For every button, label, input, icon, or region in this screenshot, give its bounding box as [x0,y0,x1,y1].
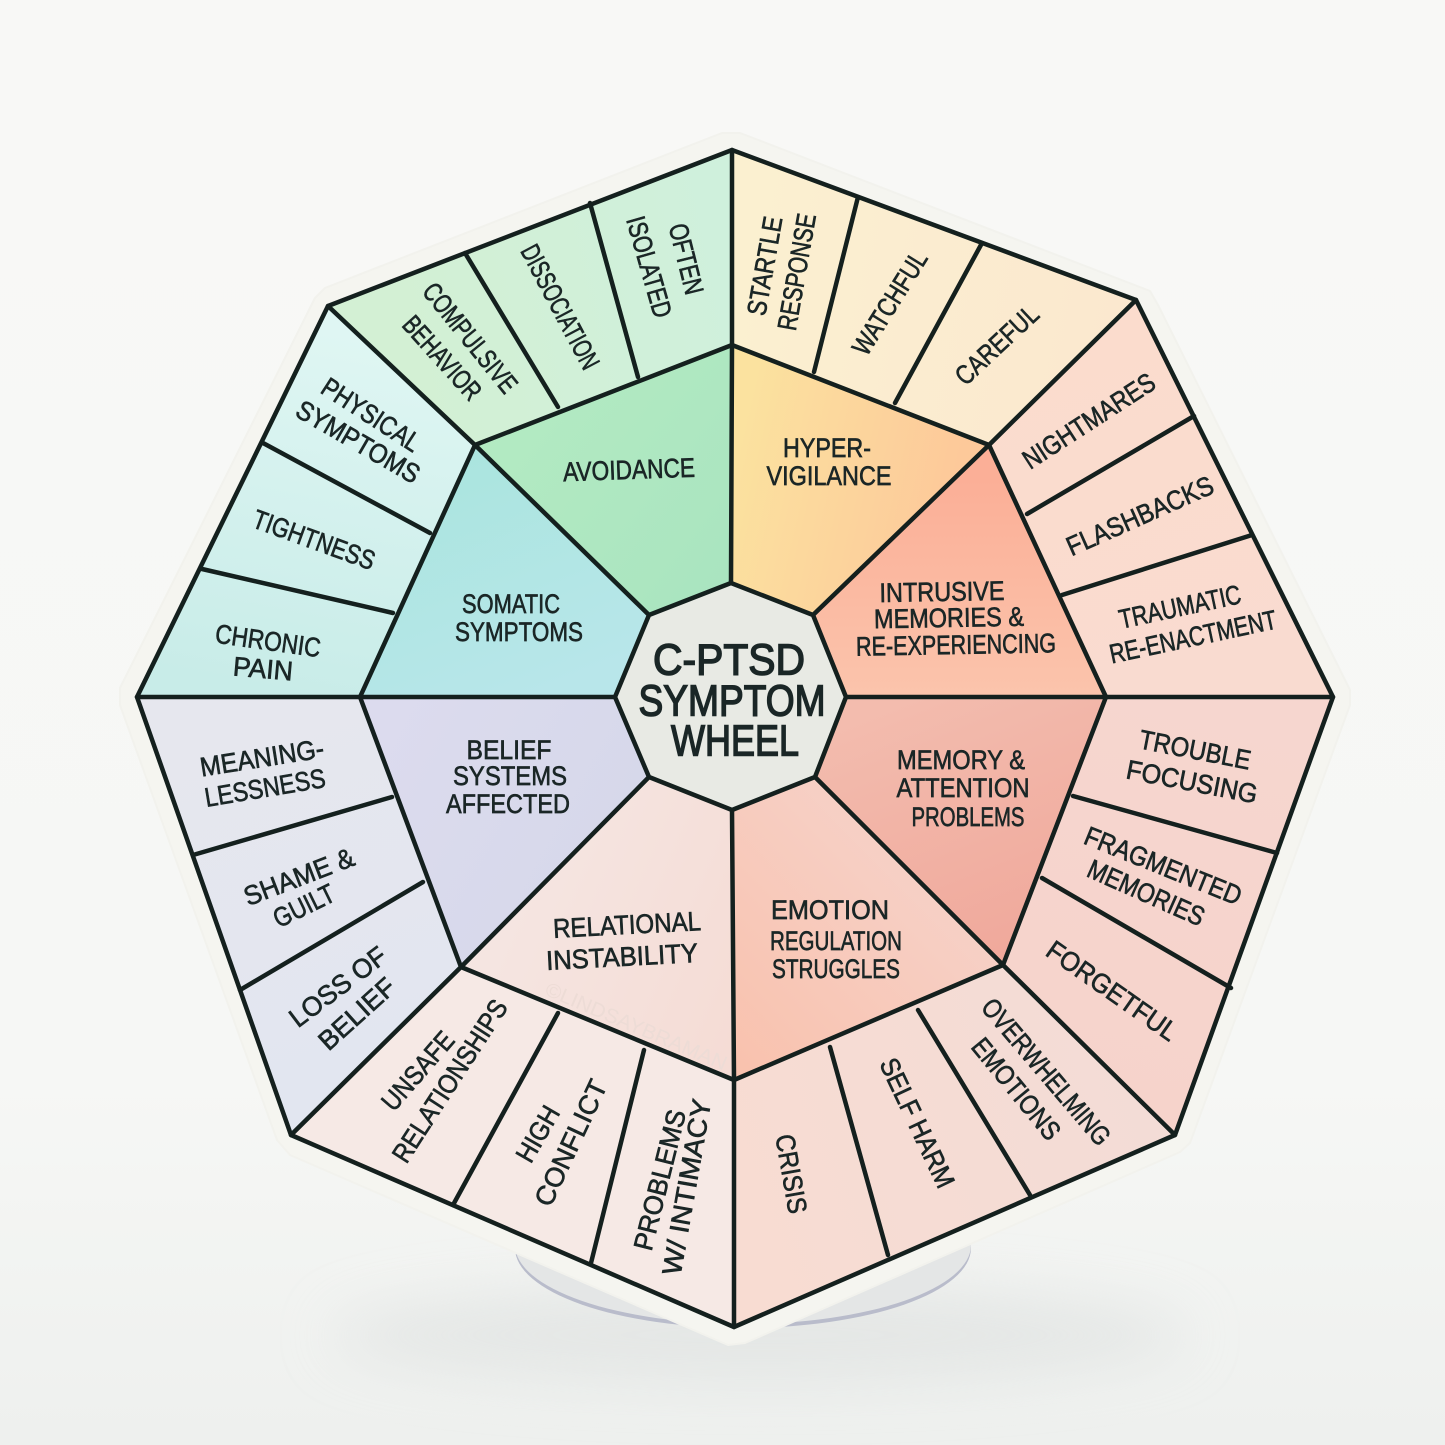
outer ring: hyper-vigilance [732,150,1136,445]
label: avoidance: AVOIDANCE [563,453,695,487]
symptom: meaninglessness [198,733,328,813]
panel: intrusive memories [813,300,1333,697]
label: intrusive memories [856,576,1056,662]
label: memory and attention: MEMORY & [897,745,1025,775]
label: memory and attention: ATTENTION [896,773,1030,803]
symptom: trouble focusing: TROUBLE [1137,724,1253,776]
symptom: physical symptoms: PHYSICAL [316,372,426,458]
symptom: trouble focusing: FOCUSING [1124,755,1260,809]
symptom: traumatic re-enactment: TRAUMATIC [1116,579,1244,635]
symptom: chronic pain [213,619,323,687]
symptom: meaninglessness: LESSNESS [202,763,328,813]
label: relational instability: INSTABILITY [545,938,699,976]
wheel outlines and dividers [137,150,1333,1327]
hub title: SYMPTOM [638,676,826,726]
label: memory and attention: PROBLEMS [912,802,1024,832]
outer ring: intrusive memories [989,300,1333,697]
symptom: dissociation: DISSOCIATION [515,239,605,375]
symptom: problems with intimacy: PROBLEMS [628,1107,692,1253]
symptom: often isolated: ISOLATED [620,213,678,321]
symptom: startle response [742,211,822,333]
panel: avoidance [328,150,732,615]
symptom: high conflict: HIGH [510,1101,566,1167]
symptom: loss of belief: BELIEF [312,972,402,1056]
symptom: traumatic re-enactment: RE-ENACTMENT [1107,605,1279,669]
label: intrusive memories: INTRUSIVE [879,576,1005,608]
label: emotion regulation: EMOTION [771,895,889,925]
category wedge: intrusive memories [813,445,1106,697]
symptom: nightmares: NIGHTMARES [1017,367,1161,475]
label: emotion regulation [770,895,902,984]
watermark: ©LINDSAYBRAMAN [542,979,730,1075]
hub octagon [615,583,846,810]
symptom: forgetful: FORGETFUL [1041,935,1183,1047]
outer ring: emotion regulation [734,965,1175,1327]
symptom: fragmented memories: FRAGMENTED [1080,821,1246,911]
symptom: chronic pain: CHRONIC [213,619,323,663]
symptom: meaninglessness: MEANING- [198,733,326,783]
hub title: WHEEL [671,716,799,766]
panel: relational instability [291,777,734,1327]
label: intrusive memories: RE-EXPERIENCING [856,628,1056,662]
symptom: physical symptoms: SYMPTOMS [291,395,425,489]
symptom: crisis: CRISIS [769,1132,813,1216]
label: emotion regulation: STRUGGLES [772,954,900,984]
symptom: fragmented memories: MEMORIES [1083,854,1209,932]
symptom: shame and guilt: SHAME & [239,842,359,912]
category wedge: avoidance [475,345,732,615]
label: relational instability [545,906,702,976]
outer ring: belief systems [137,697,461,1135]
panel: memory and attention [815,697,1333,1135]
symptom: unsafe relationships: UNSAFE [376,1025,460,1117]
panel: somatic symptoms [137,306,649,697]
symptom: overwhelming emotions [965,993,1117,1151]
outer ring: avoidance [328,150,732,445]
symptom: shame and guilt: GUILT [268,878,340,934]
symptom: often isolated [620,213,709,321]
label: somatic symptoms: SYMPTOMS [455,617,583,647]
symptom: watchful: WATCHFUL [846,245,934,361]
symptom: flashbacks: FLASHBACKS [1062,470,1218,562]
category wedge: belief systems [360,697,649,967]
symptom: problems with intimacy [628,1097,717,1277]
category wedge: relational instability [461,777,734,1080]
symptom: compulsive behavior: BEHAVIOR [396,310,488,406]
soft shadow under wheel [330,1285,1190,1385]
label: relational instability: RELATIONAL [552,906,702,944]
label: intrusive memories: MEMORIES & [874,602,1024,634]
hub title: C-PTSD [653,636,805,684]
label: belief systems: BELIEF [466,735,552,765]
panel: belief systems [137,697,649,1135]
symptom: careful: CAREFUL [949,299,1045,391]
display stand [515,1166,971,1328]
label: belief systems: SYSTEMS [453,761,567,791]
symptom: overwhelming emotions: OVERWHELMING [975,993,1117,1151]
symptom: compulsive behavior [396,277,524,406]
label: hyper-vigilance: VIGILANCE [766,461,892,491]
symptom: startle response: STARTLE [742,214,788,318]
label: memory and attention [896,745,1030,832]
symptom: tightness: TIGHTNESS [249,504,379,576]
acrylic plate edge [120,133,1350,1345]
symptom: compulsive behavior: COMPULSIVE [416,277,524,399]
label: somatic symptoms [455,589,583,647]
panel: emotion regulation [732,777,1175,1327]
panel: hyper-vigilance [731,150,1136,615]
outer ring: memory and attention [1003,697,1333,1135]
symptom: self harm: SELF HARM [874,1053,960,1193]
category wedge: memory and attention [815,697,1106,965]
symptom: loss of belief: LOSS OF [283,941,393,1033]
center hub: C-PTSD symptom wheel [615,583,846,810]
outer ring: somatic symptoms [137,306,475,697]
label: belief systems [446,735,570,819]
label: belief systems: AFFECTED [446,789,570,819]
label: hyper-vigilance: HYPER- [783,433,871,463]
symptom: traumatic re-enactment [1107,579,1279,669]
outer ring: relational instability [291,967,734,1327]
label: somatic symptoms: SOMATIC [462,589,560,619]
category wedge: somatic symptoms [360,445,649,697]
symptom: chronic pain: PAIN [232,651,294,687]
symptom: unsafe relationships: RELATIONSHIPS [386,994,514,1168]
symptom: high conflict: CONFLICT [529,1075,613,1211]
hub title [638,636,826,766]
symptom: problems with intimacy: W/ INTIMACY [657,1097,717,1277]
label: emotion regulation: REGULATION [770,926,902,956]
category wedge: emotion regulation [732,777,1003,1080]
category wedge: hyper-vigilance [731,345,989,615]
label: hyper-vigilance [766,433,892,491]
symptom: often isolated: OFTEN [663,220,709,298]
symptom: overwhelming emotions: EMOTIONS [965,1032,1067,1146]
symptom: trouble focusing [1124,724,1260,809]
symptom: startle response: RESPONSE [772,211,822,333]
